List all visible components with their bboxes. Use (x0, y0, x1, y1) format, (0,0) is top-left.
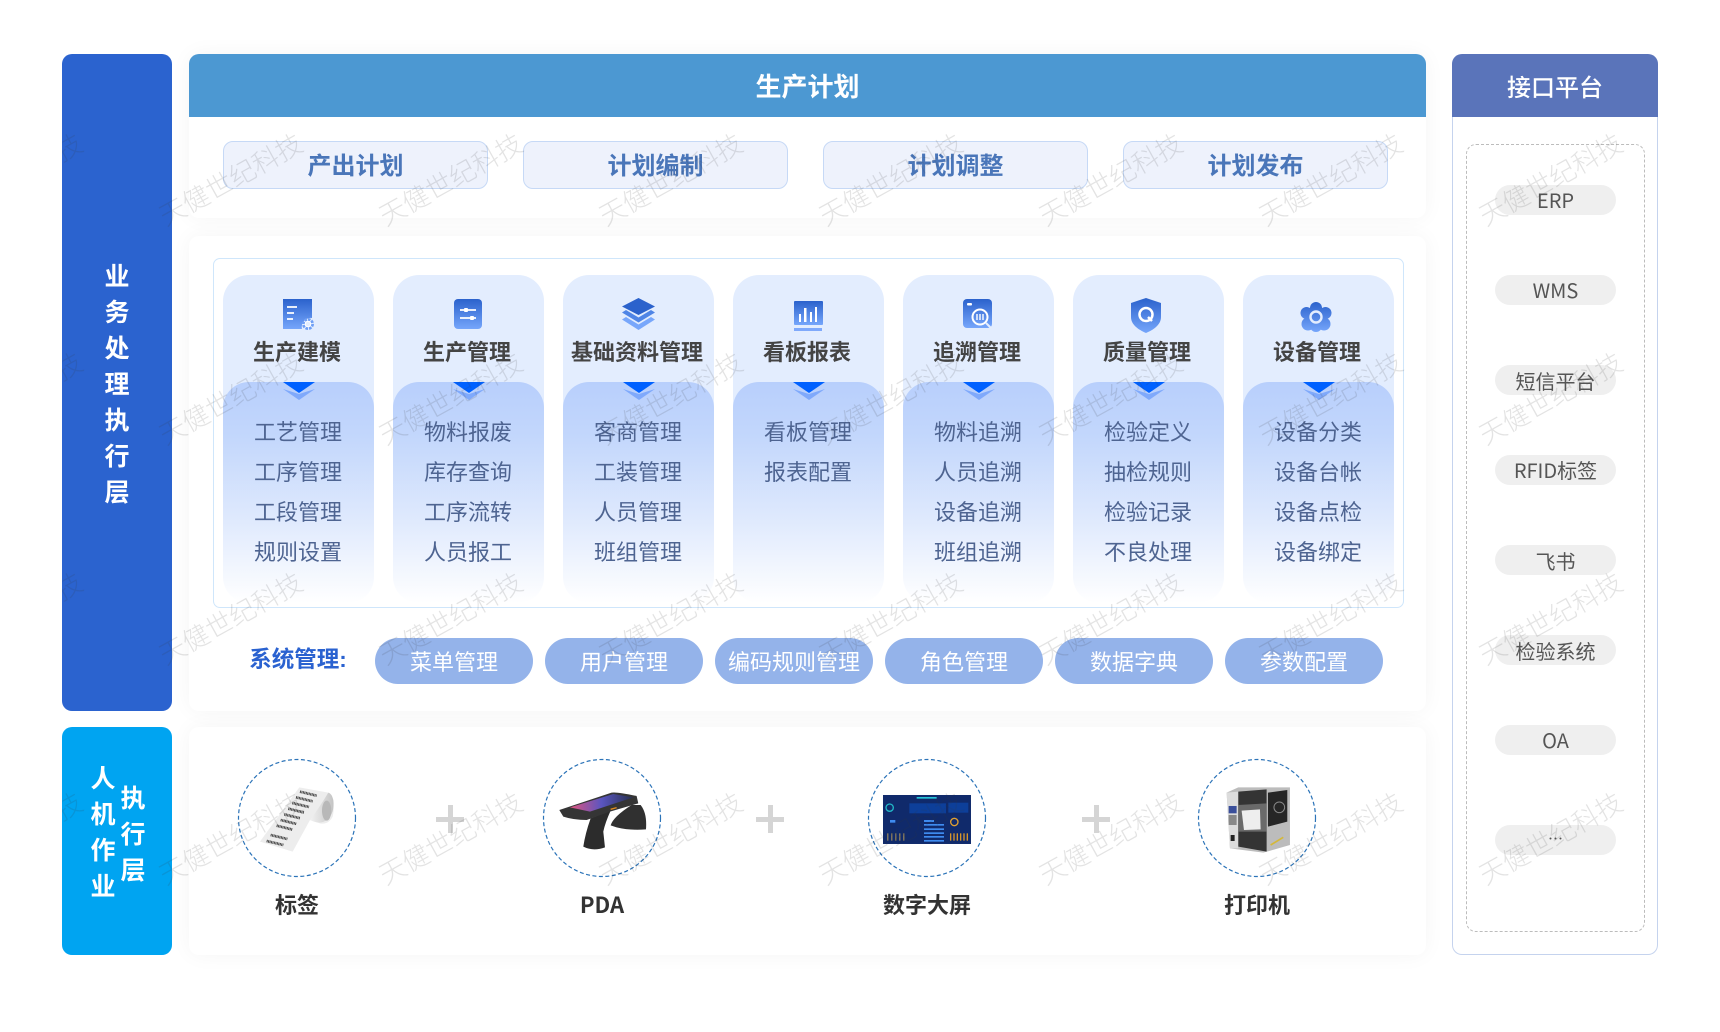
label: 系统管理: 系统管理: (249, 647, 347, 672)
dashed container for interfaces (1466, 144, 1645, 932)
interface: WMS: WMS (1533, 274, 1578, 304)
panel: interface platform (1452, 54, 1658, 955)
arrow: chevron (623, 382, 655, 400)
watermark layer: 天健世纪科技 (154, 347, 308, 451)
module: 基础资料管理 (563, 275, 714, 582)
module: 设备管理: 设备管理 (1273, 340, 1361, 365)
vertical heading: 业务处理执行层: 业 (104, 263, 130, 291)
panel: human-machine execution layer label (62, 727, 172, 955)
watermark layer: 天健世纪科技 (374, 787, 528, 891)
plan item: 计划编制 (523, 141, 788, 189)
vertical heading: 执行层: 执 (120, 785, 146, 813)
watermark layer: 天健世纪科技 (814, 787, 968, 891)
system pill: 编码规则管理 (715, 638, 873, 684)
interface: 短信平台: 短信平台 (1516, 366, 1596, 394)
module: 生产管理: 工序流转 (424, 500, 512, 525)
system pill: 参数配置 (1225, 638, 1383, 684)
plan item: 产出计划 (223, 141, 488, 189)
heading bar: 接口平台 (1452, 54, 1658, 117)
module: 质量管理: 检验记录 (1104, 500, 1192, 525)
vertical heading: 业务处理执行层: 理 (104, 371, 130, 399)
module: 基础资料管理: 班组管理 (594, 540, 682, 565)
device: 数字大屏: 数字大屏 (883, 888, 971, 920)
watermark layer: 天健世纪科技 (594, 347, 748, 451)
interface: 检验系统: 检验系统 (1516, 636, 1596, 664)
icon: shield (1131, 298, 1161, 333)
vertical heading: 业务处理执行层: 务 (104, 299, 130, 327)
system pill: 数据字典: 数据字典 (1090, 650, 1178, 675)
panel: business functions card (189, 236, 1426, 711)
watermark layer: 天健世纪科技 (594, 567, 748, 671)
system pill: 用户管理 (545, 638, 703, 684)
watermark layer: 天健世纪科技 (1254, 787, 1408, 891)
watermark layer: 天健世纪科技 (1034, 567, 1188, 671)
module: 生产管理: 物料报废 (424, 420, 512, 445)
watermark layer: 天健世纪科技 (374, 567, 528, 671)
watermark layer: 天健世纪科技 (594, 787, 748, 891)
interface: 飞书 (1495, 545, 1616, 575)
icon: plus (436, 805, 464, 833)
module: 追溯管理: 追溯管理 (933, 340, 1021, 365)
vertical heading: 业务处理执行层: 处 (104, 335, 130, 363)
module: 追溯管理: 人员追溯 (934, 460, 1022, 485)
system pill: 参数配置: 参数配置 (1260, 650, 1348, 675)
vertical heading: 人机作业 (90, 765, 116, 901)
device: PDA (542, 758, 662, 920)
module: 生产管理: 库存查询 (424, 460, 512, 485)
module: 看板报表: 报表配置 (764, 460, 852, 485)
module: 质量管理: 质量管理 (1103, 340, 1191, 365)
icon: document with gear (283, 299, 314, 330)
module: 生产建模: 工段管理 (254, 500, 342, 525)
module: 生产建模: 工序管理 (254, 460, 342, 485)
arrow: chevron (283, 382, 315, 400)
watermark layer: 天健世纪科技 (1474, 567, 1628, 671)
module: 设备管理: 设备台帐 (1274, 460, 1362, 485)
system pill: 用户管理: 用户管理 (580, 650, 668, 675)
interface: more: … (1548, 828, 1563, 848)
watermark layer: 天健世纪科技 (154, 128, 308, 232)
module: 生产建模: 工艺管理 (254, 420, 342, 445)
interface: 飞书: 飞书 (1536, 546, 1576, 574)
watermark layer: 天健世纪科技 (154, 567, 308, 671)
plan item: 产出计划: 产出计划 (308, 152, 404, 180)
plan item: 计划发布: 计划发布 (1208, 152, 1304, 180)
module: 看板报表 (733, 275, 884, 582)
icon: gear flower (1300, 302, 1332, 332)
module: 设备管理 (1243, 275, 1394, 582)
icon: plus (1082, 805, 1110, 833)
arrow: chevron (453, 382, 485, 400)
device: 标签 (238, 758, 356, 920)
arrow: chevron (793, 382, 825, 400)
module: 设备管理: 设备点检 (1274, 500, 1362, 525)
vertical heading: 执行层: 行 (120, 821, 146, 849)
watermark layer: 天健世纪科技 (814, 128, 968, 232)
watermark layer: 天健世纪科技 (1474, 128, 1628, 232)
vertical heading: 业务处理执行层: 行 (104, 443, 130, 471)
device: 打印机: 打印机 (1224, 888, 1290, 920)
vertical heading: 执行层: 层 (120, 857, 146, 885)
module: 质量管理: 抽检规则 (1104, 460, 1192, 485)
arrow: chevron (963, 382, 995, 400)
arrow: chevron (1303, 382, 1335, 400)
system pill: 编码规则管理: 编码规则管理 (728, 650, 860, 675)
vertical heading: 人机作业: 业 (90, 873, 116, 901)
system pill: 菜单管理: 菜单管理 (410, 650, 498, 675)
panel: production plan (189, 54, 1426, 218)
module: 追溯管理 (903, 275, 1054, 582)
module: 设备管理: 设备分类 (1274, 420, 1362, 445)
module: 生产管理: 人员报工 (424, 540, 512, 565)
module: 基础资料管理: 人员管理 (594, 500, 682, 525)
watermark layer: 天健世纪科技 (374, 347, 528, 451)
interface: OA (1495, 725, 1616, 755)
plan item: 计划调整 (823, 141, 1088, 189)
watermark layer: 天健世纪科技 (1034, 787, 1188, 891)
vertical heading: 执行层 (120, 785, 146, 885)
vertical heading: 人机作业: 作 (90, 837, 116, 865)
watermark layer: 天健世纪科技 (1474, 787, 1628, 891)
system pill: 角色管理: 角色管理 (920, 650, 1008, 675)
module: 生产建模: 生产建模 (253, 340, 341, 365)
watermark layer: 天健世纪科技 (1254, 128, 1408, 232)
interface: ERP: ERP (1537, 184, 1574, 214)
module: 生产建模 (223, 275, 374, 582)
system pill: 菜单管理 (375, 638, 533, 684)
icon: bar chart (794, 301, 823, 331)
module: 看板报表: 看板报表 (763, 340, 851, 365)
vertical heading: 业务处理执行层 (104, 263, 130, 507)
module: 基础资料管理: 基础资料管理 (571, 340, 703, 365)
interface: more (1495, 825, 1616, 855)
watermark layer: 天健世纪科技 (374, 128, 528, 232)
watermark layer (62, 134, 1624, 886)
interface: RFID标签 (1495, 455, 1616, 485)
interface: 短信平台 (1495, 365, 1616, 395)
system pill: 数据字典 (1055, 638, 1213, 684)
icon: layers (622, 298, 655, 330)
icon: search report (963, 299, 992, 328)
module: 生产管理 (393, 275, 544, 582)
panel: devices card (189, 727, 1426, 955)
frame around function modules (213, 258, 1404, 608)
icon: plus (756, 805, 784, 833)
watermark layer: 天健世纪科技 (1254, 567, 1408, 671)
vertical heading: 业务处理执行层: 层 (104, 479, 130, 507)
vertical heading: 人机作业: 机 (90, 801, 116, 829)
watermark layer: 天健世纪科技 (1034, 347, 1188, 451)
vertical heading: 人机作业: 人 (90, 765, 116, 793)
watermark layer: 天健世纪科技 (594, 128, 748, 232)
interface: 检验系统 (1495, 635, 1616, 665)
module: 基础资料管理: 工装管理 (594, 460, 682, 485)
module: 看板报表: 看板管理 (764, 420, 852, 445)
module: 生产建模: 规则设置 (254, 540, 342, 565)
module: 设备管理: 设备绑定 (1274, 540, 1362, 565)
module: 质量管理 (1073, 275, 1224, 582)
icon: sliders (454, 299, 482, 329)
module: 生产管理: 生产管理 (423, 340, 511, 365)
module: 追溯管理: 设备追溯 (934, 500, 1022, 525)
heading bar: 接口平台: 接口平台 (1507, 75, 1603, 102)
plan item: 计划调整: 计划调整 (908, 152, 1004, 180)
watermark layer: 天健世纪科技 (814, 347, 968, 451)
vertical heading: 业务处理执行层: 执 (104, 407, 130, 435)
interface: RFID标签: RFID标签 (1514, 454, 1597, 484)
heading bar: 生产计划 (189, 54, 1426, 117)
device: PDA: PDA (580, 888, 624, 920)
module: 追溯管理: 班组追溯 (934, 540, 1022, 565)
device: 数字大屏 (868, 758, 986, 920)
plan item: 计划编制: 计划编制 (608, 152, 704, 180)
device: 标签: 标签 (275, 888, 319, 920)
system pill: 角色管理 (885, 638, 1043, 684)
arrow: chevron (1133, 382, 1165, 400)
interface: WMS (1495, 275, 1616, 305)
watermark layer: 天健世纪科技 (1474, 347, 1628, 451)
watermark layer: 天健世纪科技 (814, 567, 968, 671)
interface: OA: OA (1542, 724, 1569, 754)
module: 追溯管理: 物料追溯 (934, 420, 1022, 445)
module: 基础资料管理: 客商管理 (594, 420, 682, 445)
plan item: 计划发布 (1123, 141, 1388, 189)
panel: business processing execution layer label (62, 54, 172, 711)
module: 质量管理: 检验定义 (1104, 420, 1192, 445)
watermark layer: 天健世纪科技 (154, 787, 308, 891)
watermark layer: 天健世纪科技 (1034, 128, 1188, 232)
watermark layer: 天健世纪科技 (1254, 347, 1408, 451)
heading bar: 生产计划: 生产计划 (755, 72, 860, 102)
device: 打印机 (1198, 758, 1316, 920)
interface: ERP (1495, 185, 1616, 215)
module: 质量管理: 不良处理 (1104, 540, 1192, 565)
